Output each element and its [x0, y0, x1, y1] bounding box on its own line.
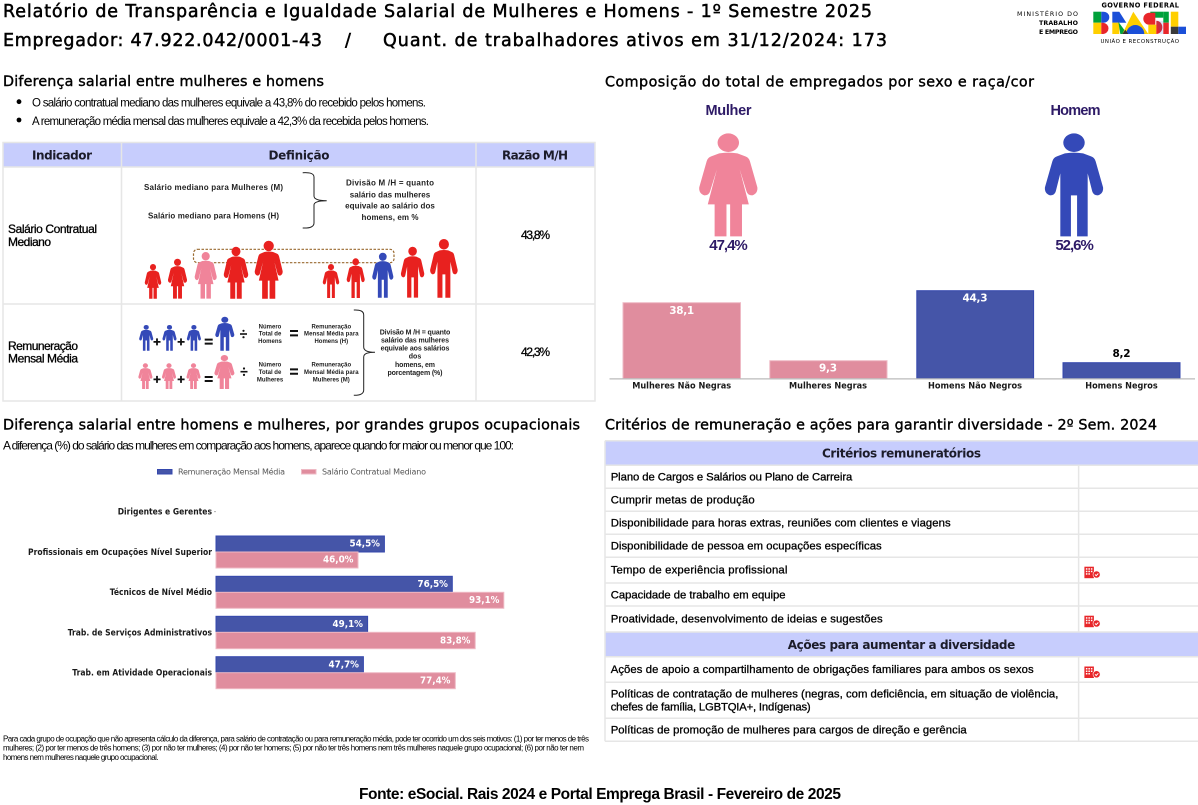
- bar: Mulheres Negras: 9,3: [819, 363, 837, 375]
- ministry name: E EMPREGO: [1039, 29, 1079, 36]
- footnote: mulheres; (2) por ter menos de três homens; (3) por não ter mulheres; (4) por não ter homens; (5) por não ter três homens nem três mulheres naquele grupo ocupacional; (6) por não ter nem: [3, 744, 584, 753]
- group: Serviços Administrativos: Trab. de Serviços Administrativos: [68, 628, 212, 638]
- bar: Homens Não Negros: Homens Não Negros: [928, 382, 1022, 392]
- column headings: Indicador: [32, 148, 92, 162]
- header: report title: [3, 2, 887, 51]
- group: Profissionais: 46,0%: [323, 555, 354, 566]
- column headings: [32, 148, 568, 162]
- row label: remuneração mensal média: Remuneração: [8, 339, 78, 353]
- bar: Mulheres Negras: Mulheres Negras: [789, 382, 867, 392]
- section title: critérios: Critérios remuneratórios: [822, 446, 981, 460]
- logo: ministry and government: [1017, 1, 1186, 45]
- bar: Homens Negros: Homens Negros: [1085, 382, 1158, 392]
- women formula: Mulheres (M): [313, 377, 350, 383]
- action rows: Ações de apoio a compartilhamento de obrigações familiares para ambos os sexos: [611, 664, 1034, 676]
- median salary definition: Salário mediano para Mulheres (M): [144, 183, 283, 192]
- bar: Mulheres Não Negras: 38,1: [669, 305, 694, 317]
- group: Técnicos: 76,5%: [418, 579, 448, 590]
- chart legend: Salário Contratual Mediano: [322, 468, 426, 476]
- heading: Composição do total de empregados por sexo e raça/cor: [605, 75, 1034, 91]
- icon: Brasil wordmark: [1093, 12, 1186, 34]
- division explanation: homens, em: [395, 362, 435, 369]
- men formula: Homens: [258, 339, 282, 345]
- column headings: Razão M/H: [502, 148, 568, 162]
- bar: Homens Não Negros: 44,3: [962, 293, 988, 305]
- division explanation: dos: [409, 354, 421, 361]
- action rows: chefes de família, LGBTQIA+, Indígenas): [611, 702, 811, 714]
- chart legend: [158, 466, 426, 476]
- median salary definition: equivale ao salário dos: [345, 202, 435, 211]
- section header backgrounds: [605, 441, 1198, 657]
- bullet list: A remuneração média mensal das mulheres equivale a 42,3% da recebida pelos homens.: [32, 116, 429, 128]
- action rows: Políticas de promoção de mulheres para cargos de direção e gerência: [611, 725, 967, 737]
- group: Técnicos: Técnicos de Nível Médio: [110, 587, 212, 598]
- title line 2: employer: Empregador: 47.922.042/0001-43: [3, 31, 322, 51]
- bar: Homens Negros: 8,2: [1112, 348, 1130, 360]
- bullet list: O salário contratual mediano das mulheres equivale a 43,8% do recebido pelos homens.: [32, 98, 426, 110]
- criteria rows: Proatividade, desenvolvimento de ideias e sugestões: [611, 614, 883, 626]
- division explanation: salário das mulheres: [381, 337, 449, 344]
- men formula: [139, 317, 359, 351]
- bullet list: [17, 98, 429, 128]
- title separator: /: [345, 31, 351, 51]
- panel: salary difference: [3, 74, 595, 401]
- bar: Homens Não Negros: [917, 291, 1034, 392]
- division explanation: porcentagem (%): [388, 370, 442, 377]
- man share: 52,6%: [1055, 237, 1094, 254]
- indicator table: [3, 142, 595, 401]
- bar: Mulheres Negras: [770, 361, 887, 392]
- ministry name: MINISTÉRIO DO: [1017, 9, 1078, 18]
- source footer: Fonte: eSocial. Rais 2024 e Portal Emprega Brasil - Fevereiro de 2025: [359, 786, 841, 803]
- woman share: 47,4%: [709, 237, 748, 254]
- title line 2: workers: Quant. de trabalhadores ativos em 31/12/2024: 173: [383, 31, 887, 51]
- icon: company marks experience: [1084, 567, 1100, 578]
- division explanation: Divisão M /H = quanto: [380, 329, 450, 336]
- row label: salário contratual mediano: [8, 222, 97, 249]
- criteria rows: Capacidade de trabalho em equipe: [611, 590, 786, 602]
- median salary definition: [144, 173, 435, 228]
- men formula: Remuneração: [311, 324, 351, 330]
- group: Técnicos: [110, 576, 504, 608]
- average pay definition: [138, 310, 450, 395]
- women formula: Total de: [259, 370, 282, 376]
- bar chart: sex and race: [610, 291, 1195, 392]
- value: 43,8%: 43,8%: [521, 228, 550, 242]
- group: Dirigentes e Gerentes: Dirigentes e Gerentes: [118, 508, 212, 518]
- heading: Critérios de remuneração e ações para garantir diversidade - 2º Sem. 2024: [605, 417, 1157, 433]
- women formula: Mensal Média para: [304, 370, 359, 376]
- column headings: Definição: [268, 148, 330, 162]
- group: Serviços Administrativos: [68, 616, 475, 649]
- men formula: Homens (H): [314, 339, 348, 345]
- panel: pay gap by occupation: [3, 417, 589, 762]
- table header background: [3, 142, 595, 167]
- median salary definition: Divisão M /H = quanto: [346, 179, 434, 188]
- row label: salário contratual mediano: Mediano: [8, 235, 51, 249]
- ministry name: TRABALHO: [1039, 20, 1079, 27]
- subheading: A diferença (%) do salário das mulheres em comparação aos homens, aparece quando for maior ou menor que 100:: [3, 438, 514, 452]
- women formula: Mulheres: [257, 377, 284, 383]
- median salary definition: Salário mediano para Homens (H): [148, 212, 279, 221]
- men formula: Número: [259, 324, 282, 330]
- criteria rows: Cumprir metas de produção: [611, 495, 755, 507]
- brace: [354, 310, 375, 395]
- value: 42,3%: 42,3%: [521, 345, 550, 359]
- median people illustration: [145, 239, 458, 299]
- action rows: [611, 664, 1058, 737]
- men formula: Total de: [259, 332, 282, 338]
- government slogan: UNIÃO E RECONSTRUÇÃO: [1100, 38, 1179, 45]
- group: Atividade Operacionais: [72, 657, 455, 689]
- women formula: Número: [259, 363, 282, 369]
- panel: workforce composition: [605, 75, 1195, 392]
- criteria table: [605, 441, 1198, 741]
- ministry name: [1017, 9, 1079, 36]
- footnote: homens nem mulheres naquele grupo ocupacional.: [3, 753, 158, 762]
- women formula: Remuneração: [311, 363, 351, 369]
- division explanation: equivale aos salários: [381, 346, 449, 353]
- criteria rows: Disponibilidade de pessoa em ocupações específicas: [611, 541, 882, 553]
- group: Atividade Operacionais: 47,7%: [328, 659, 359, 670]
- criteria rows: Plano de Cargos e Salários ou Plano de Carreira: [611, 472, 853, 484]
- man share: Homem: [1050, 103, 1100, 119]
- group: Atividade Operacionais: Trab. em Atividade Operacionais: [72, 669, 212, 679]
- action rows: Políticas de contratação de mulheres (negras, com deficiência, em situação de violência,: [611, 689, 1058, 701]
- median salary definition: salário das mulheres: [350, 190, 431, 199]
- footnote: Para cada grupo de ocupação que não apresenta cálculo da diferença, para salário de contratação ou para remuneração média, pode ter ocorrido um dos seis motivos: (1) por ter menos de três: [3, 734, 589, 743]
- man share: [1045, 103, 1103, 254]
- bar chart: occupations: [28, 508, 504, 689]
- division explanation: [380, 329, 450, 377]
- median salary definition: homens, em %: [362, 213, 418, 222]
- criteria rows: Disponibilidade para horas extras, reuniões com clientes e viagens: [611, 518, 951, 530]
- group: Serviços Administrativos: 83,8%: [440, 635, 470, 646]
- chart legend: Remuneração Mensal Média: [178, 466, 285, 476]
- bar: Mulheres Não Negras: Mulheres Não Negras: [632, 382, 731, 392]
- woman share: Mulher: [706, 103, 752, 119]
- criteria rows: [611, 472, 951, 626]
- group: Técnicos: 93,1%: [469, 595, 500, 606]
- heading: Diferença salarial entre homens e mulheres, por grandes grupos ocupacionais: [3, 417, 580, 433]
- heading: Diferença salarial entre mulheres e homens: [3, 74, 324, 90]
- dashed median highlight: [194, 249, 394, 263]
- icon: company marks family support: [1084, 666, 1100, 678]
- row label: remuneração mensal média: Mensal Média: [8, 352, 78, 366]
- women formula: [138, 355, 359, 389]
- panel: criteria and actions: [605, 417, 1198, 741]
- brace: [303, 173, 327, 228]
- icon: company marks proactivity: [1084, 616, 1100, 627]
- criteria rows: Tempo de experiência profissional: [611, 565, 787, 577]
- group: Serviços Administrativos: 49,1%: [332, 619, 363, 630]
- footnote: [3, 734, 589, 762]
- bar: Homens Negros: [1063, 348, 1180, 392]
- group: Profissionais: 54,5%: [350, 539, 380, 550]
- group: Profissionais: [28, 536, 384, 568]
- woman share: [699, 103, 757, 254]
- title line 1: Relatório de Transparência e Igualdade Salarial de Mulheres e Homens - 1º Semestre 2025: [3, 2, 872, 22]
- government label: GOVERNO FEDERAL: [1102, 1, 1180, 9]
- section title: ações: Ações para aumentar a diversidade: [788, 638, 1015, 652]
- bar: Mulheres Não Negras: [623, 303, 740, 392]
- row label: salário contratual mediano: Salário Contratual: [8, 222, 97, 236]
- group: Atividade Operacionais: 77,4%: [420, 675, 450, 686]
- group: Profissionais: Profissionais em Ocupações Nível Superior: [28, 548, 213, 558]
- row label: remuneração mensal média: [8, 339, 78, 366]
- men formula: Mensal Média para: [304, 332, 359, 338]
